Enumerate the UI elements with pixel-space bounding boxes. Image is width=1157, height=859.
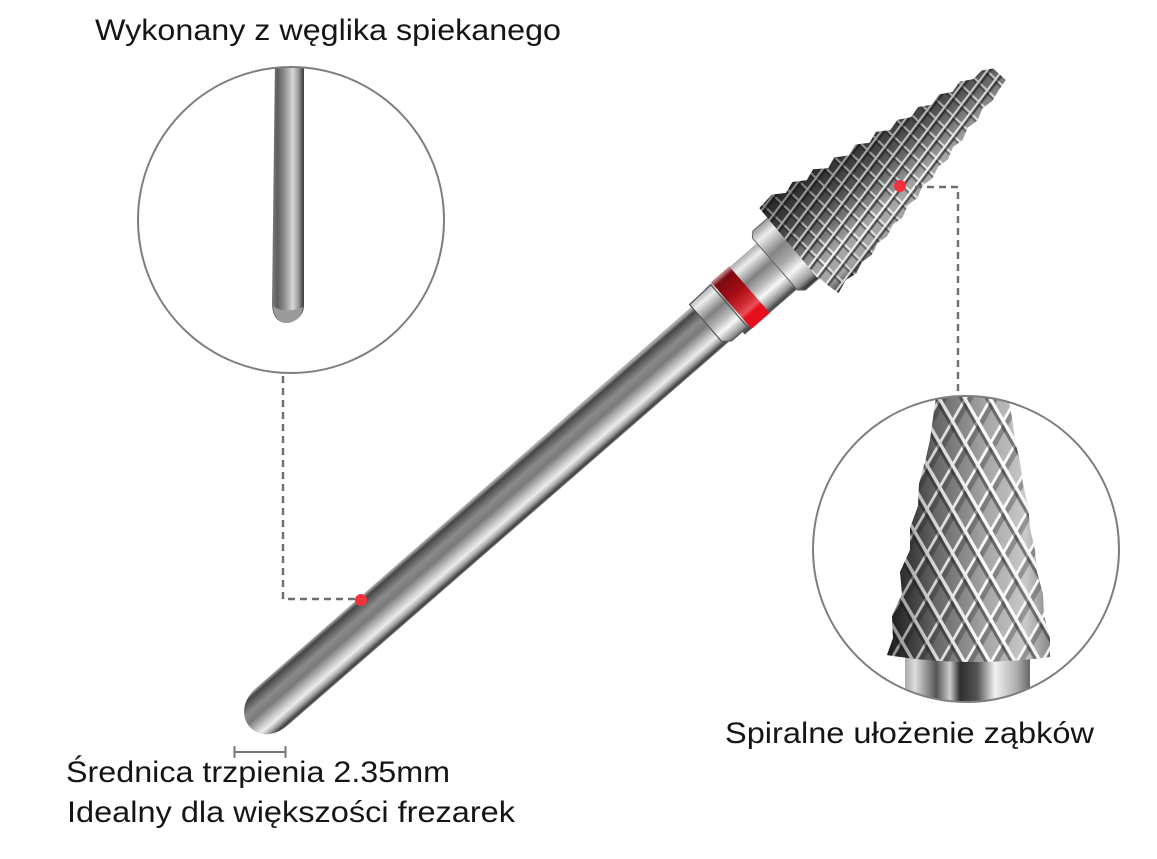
- drill bit: [211, 29, 1039, 771]
- red marker: teeth: [894, 180, 906, 192]
- callout: shank zoom circle: [138, 60, 444, 373]
- zoomed cutting cone: [887, 390, 1050, 705]
- caption: shank diameter: Średnica trzpienia 2.35mm: [66, 755, 450, 789]
- red band: [711, 266, 770, 329]
- dashed connector: teeth: [915, 187, 958, 396]
- red marker: shank: [355, 594, 367, 606]
- diameter bracket: [234, 746, 286, 758]
- cutting cone: [757, 29, 1039, 297]
- neck: [705, 241, 799, 335]
- dashed connector: shank: [283, 376, 355, 599]
- caption: compatibility: Idealny dla większości frezarek: [67, 796, 516, 829]
- upper collar: [749, 217, 821, 294]
- callout: teeth zoom circle: [813, 390, 1119, 705]
- shank: [232, 304, 729, 745]
- zoomed rod: [272, 60, 304, 323]
- caption: teeth: Spiralne ułożenie ząbków: [725, 717, 1094, 750]
- heading: material: Wykonany z węglika spiekanego: [95, 14, 561, 47]
- lower collar: [689, 285, 748, 346]
